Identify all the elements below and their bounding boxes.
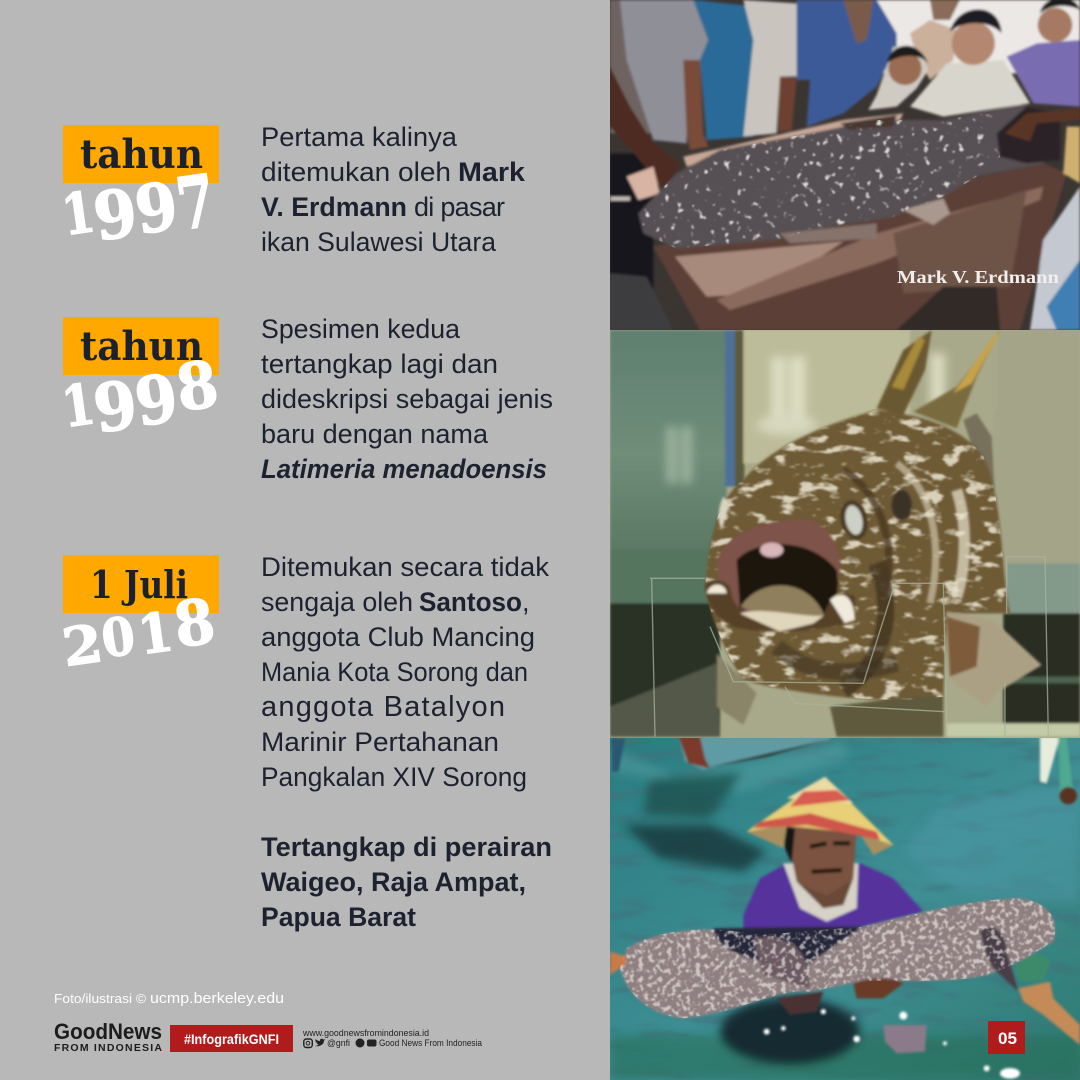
timeline entry: 1997 xyxy=(57,122,526,263)
description: 2018: anggota Batalyon xyxy=(261,691,505,723)
location note: Tertangkap di perairan xyxy=(261,832,552,862)
description: 1998: tertangkap lagi dan xyxy=(261,349,498,379)
hashtag badge xyxy=(170,1025,293,1052)
description: 2018: Mania Kota Sorong dan xyxy=(261,657,528,687)
description: 1997: ikan Sulawesi Utara xyxy=(261,227,497,257)
location note xyxy=(261,832,552,932)
description: 2018: Santoso xyxy=(419,587,522,617)
photo: fish on cart with crowd, 1997 xyxy=(610,0,1080,330)
date badge: tahun 1997: 9 xyxy=(89,173,142,257)
social links xyxy=(302,1028,483,1049)
description: 1997: Mark xyxy=(458,157,526,187)
description: 2018: sengaja oleh xyxy=(261,587,413,617)
description: 1997: di pasar xyxy=(414,192,505,222)
date badge: tahun 1997: 1 xyxy=(58,179,99,249)
date badge: tahun 1997: 7 xyxy=(171,157,221,247)
timeline entry: 1 Juli 2018 xyxy=(57,552,552,932)
page number badge: 05 xyxy=(998,1029,1017,1048)
description: 1997 xyxy=(261,122,526,257)
location note: Waigeo, Raja Ampat, xyxy=(261,867,526,897)
description: 2018 xyxy=(261,552,549,792)
social links: Good News From Indonesia xyxy=(379,1038,483,1049)
description: 2018: Marinir Pertahanan xyxy=(261,727,499,757)
page number badge xyxy=(988,1021,1025,1054)
date badge: 1 Juli 2018: 1 Juli xyxy=(90,562,188,607)
date badge: tahun 1997: 9 xyxy=(130,167,183,250)
logo: GoodNews From Indonesia: GoodNews xyxy=(54,1019,162,1044)
social links: www.goodnewsfromindonesia.id xyxy=(302,1028,429,1039)
photo credit: Foto/ilustrasi © xyxy=(54,991,146,1006)
description: 1997: Pertama kalinya xyxy=(261,122,458,152)
date badge: 1 Juli 2018: 2 xyxy=(58,613,107,679)
social links: @gnfi xyxy=(327,1038,350,1049)
timeline entry: 1998 xyxy=(57,314,553,484)
description: 1998 xyxy=(261,314,553,484)
photo: fisherman holding coelacanth in water, 2018 xyxy=(610,735,1080,1080)
description: 2018: Ditemukan secara tidak xyxy=(261,552,549,582)
date badge: tahun 1997 xyxy=(57,125,221,263)
date badge: tahun 1998: tahun xyxy=(80,323,203,370)
date badge: tahun 1998: 1 xyxy=(58,371,99,441)
date badge: tahun 1997: tahun xyxy=(80,131,203,178)
description: 1998: Latimeria menadoensis xyxy=(261,454,547,484)
date badge: tahun 1998: 8 xyxy=(172,347,223,427)
logo: GoodNews From Indonesia: FROM INDONESIA xyxy=(54,1042,162,1054)
description: 1998: baru dengan nama xyxy=(261,419,489,449)
date badge: 1 Juli 2018: 8 xyxy=(170,584,219,662)
date badge: tahun 1998: 9 xyxy=(130,359,183,442)
description: 1997: ditemukan oleh xyxy=(261,157,451,187)
photo watermark: Mark V. Erdmann: Mark V. Erdmann xyxy=(897,267,1059,287)
date badge: tahun 1998 xyxy=(57,317,224,453)
hashtag badge: #InfografikGNFI xyxy=(184,1031,279,1047)
description: 2018: anggota Club Mancing xyxy=(261,622,535,652)
photo: preserved coelacanth in tank, 1998 xyxy=(610,330,1080,738)
photo credit xyxy=(54,991,284,1007)
date badge: 1 Juli 2018 xyxy=(57,555,219,679)
footer branding xyxy=(54,1019,483,1054)
location note: Papua Barat xyxy=(261,902,416,932)
photo credit: ucmp.berkeley.edu xyxy=(150,991,284,1007)
date badge: 1 Juli 2018: 1 xyxy=(134,599,177,667)
description: 2018: Pangkalan XIV Sorong xyxy=(261,762,527,792)
date badge: tahun 1998: 9 xyxy=(89,365,142,449)
date badge: 1 Juli 2018: 0 xyxy=(98,605,139,670)
description: 1997: V. Erdmann xyxy=(261,192,407,222)
logo: GoodNews From Indonesia xyxy=(54,1019,162,1054)
description: 1998: dideskripsi sebagai jenis xyxy=(261,384,553,414)
description: 2018: , xyxy=(522,587,530,617)
description: 1998: Spesimen kedua xyxy=(261,314,461,344)
